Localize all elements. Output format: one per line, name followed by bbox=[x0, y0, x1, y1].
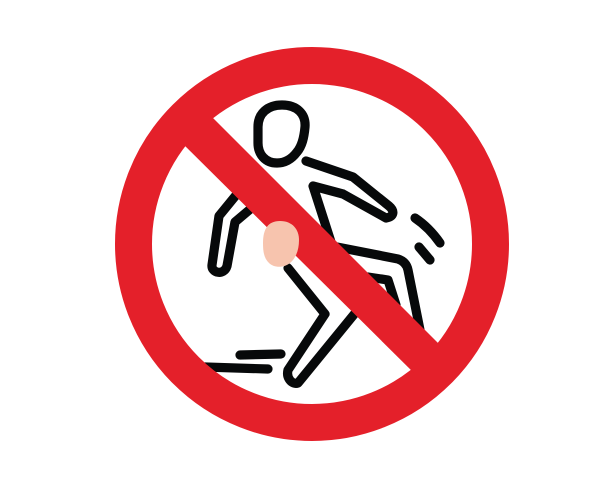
skin-colored knee patch bbox=[263, 221, 299, 267]
icon: slipping person bbox=[205, 105, 440, 383]
forward leg bbox=[288, 268, 356, 383]
forward arm bbox=[212, 194, 254, 272]
trailing leg inner edge bbox=[368, 277, 396, 305]
floor line lower bbox=[205, 367, 268, 369]
trailing leg bbox=[337, 247, 420, 330]
prohibition diagonal bar bbox=[177, 110, 446, 378]
floor line upper bbox=[240, 354, 281, 355]
motion lines bbox=[415, 218, 440, 243]
motion line short bbox=[419, 247, 430, 260]
torso and trailing arm bbox=[306, 161, 393, 242]
prohibition ring bbox=[134, 66, 490, 422]
head bbox=[258, 105, 305, 163]
